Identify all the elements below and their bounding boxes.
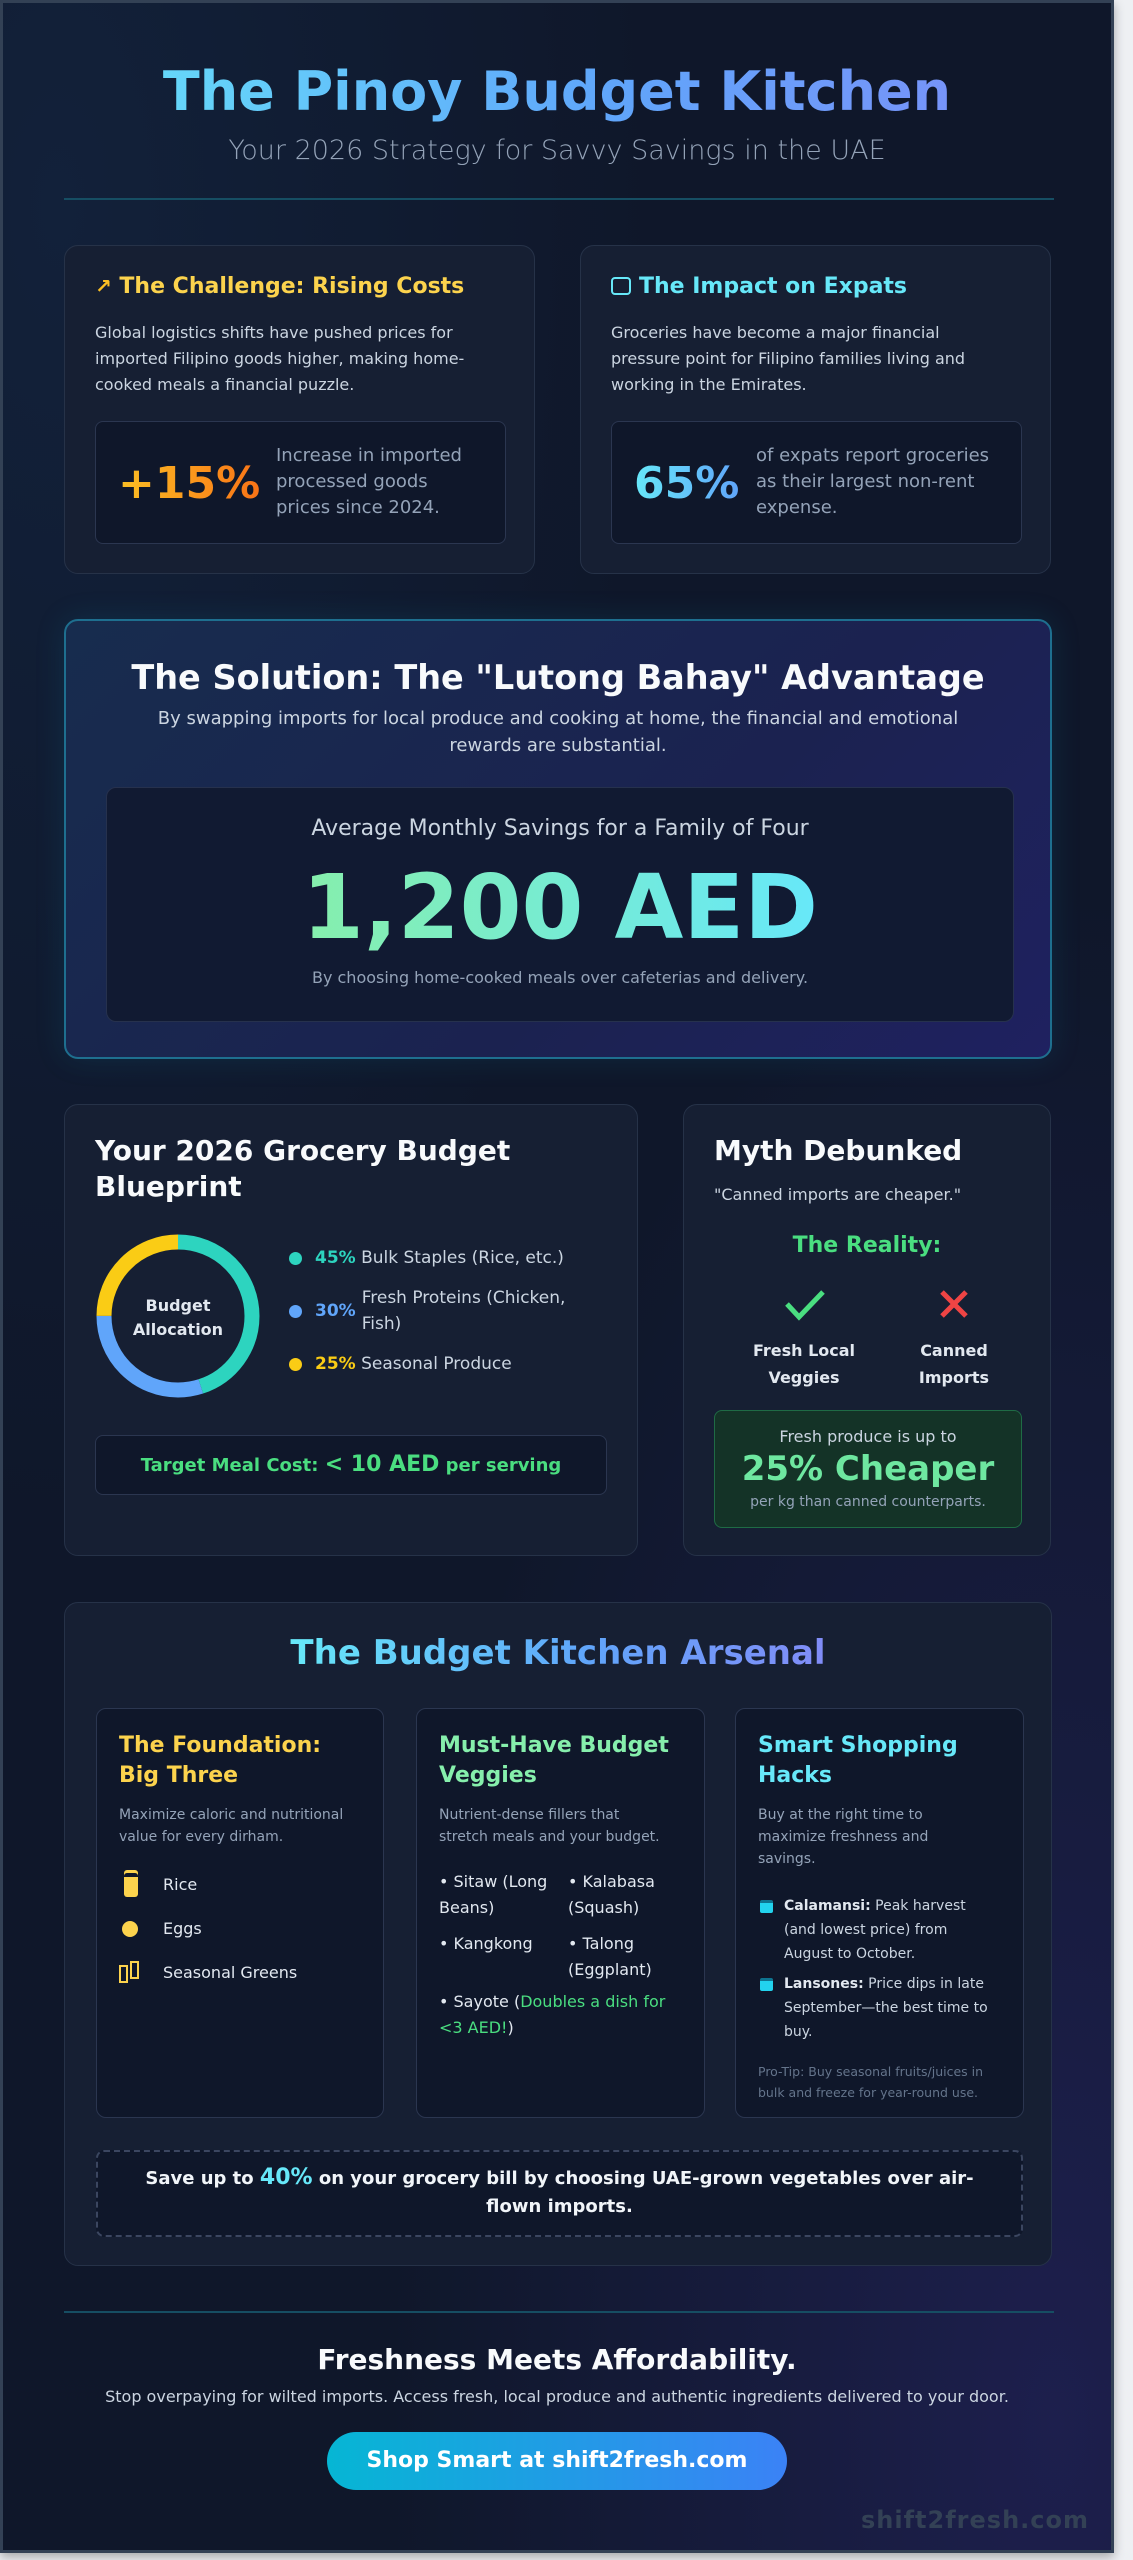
list: veggies: • Kangkong xyxy=(439,1934,533,1953)
list: big three: Eggs xyxy=(163,1919,202,1938)
list: veggies: • Talong (Eggplant) xyxy=(568,1934,652,1979)
list: hacks: Lansones: Price dips in late September—the best time to buy. xyxy=(784,1976,988,2040)
savings box: Average Monthly Savings for a Family of Four xyxy=(311,816,809,841)
text: solution: By swapping imports for local produce and cooking at home, the financial and emotional rewards are substantial. xyxy=(158,708,958,756)
heading: solution: The Solution: The "Lutong Bahay" Advantage xyxy=(131,658,985,697)
stat: 65%: 65% xyxy=(634,458,739,509)
sub-card: veggies xyxy=(416,1708,705,2118)
sub-card: hacks: Smart Shopping Hacks xyxy=(758,1733,958,1788)
callout: save 40%: Save up to 40% on your grocery bill by choosing UAE-grown vegetables over air-flown imports. xyxy=(145,2165,974,2217)
callout: 25% cheaper: per kg than canned counterparts. xyxy=(750,1494,986,1510)
donut chart: Allocation xyxy=(133,1320,223,1339)
icon: cross xyxy=(940,1290,968,1318)
savings box: By choosing home-cooked meals over cafeterias and delivery. xyxy=(312,968,808,987)
stat: 65%: of expats report groceries as their largest non-rent expense. xyxy=(756,445,989,518)
panel: myth debunked: Fresh Local Veggies xyxy=(753,1341,855,1387)
list: veggies xyxy=(439,1872,666,2037)
panel: impact xyxy=(580,245,1051,574)
list: veggies: • Kalabasa (Squash) xyxy=(568,1872,655,1917)
target meal cost xyxy=(95,1435,607,1495)
legend: 30% xyxy=(315,1301,356,1321)
legend: 25% Seasonal Produce xyxy=(315,1354,512,1374)
stat: +15%: Increase in imported processed goods prices since 2024. xyxy=(276,445,462,518)
callout: save 40% xyxy=(96,2150,1023,2237)
heading: impact: The Impact on Expats xyxy=(639,274,907,299)
list: veggies: • Sayote (Doubles a dish for <3 AED!) xyxy=(439,1992,665,2037)
legend: Fresh Proteins (Chicken, Fish) xyxy=(362,1288,565,1334)
heading: blueprint: Your 2026 Grocery Budget Blueprint xyxy=(95,1134,510,1203)
text: impact: Groceries have become a major financial pressure point for Filipino families living and working in the Emirates. xyxy=(611,323,965,394)
list: big three: Seasonal Greens xyxy=(163,1963,297,1982)
callout: 25% cheaper: Fresh produce is up to xyxy=(779,1427,957,1446)
title xyxy=(3,59,1111,125)
stat: +15% xyxy=(95,421,506,544)
watermark: shift2fresh.com xyxy=(861,2506,1089,2534)
panel: myth debunked: The Reality: xyxy=(793,1233,941,1258)
sub-card: hacks: Buy at the right time to maximize freshness and savings. xyxy=(758,1807,928,1867)
target meal cost: Target Meal Cost: < 10 AED per serving xyxy=(141,1452,561,1477)
list: hacks: Calamansi: Peak harvest (and lowest price) from August to October. xyxy=(784,1898,966,1962)
panel: challenge xyxy=(64,245,535,574)
donut chart xyxy=(96,1234,260,1398)
text: challenge: Global logistics shifts have pushed prices for imported Filipino goods higher, making home-cooked meals a financial puzzle. xyxy=(95,323,464,394)
sub-card: hacks: Pro-Tip: Buy seasonal fruits/juices in bulk and freeze for year-round use. xyxy=(758,2064,983,2100)
sub-card: veggies: Must-Have Budget Veggies xyxy=(439,1733,669,1788)
footer text: Stop overpaying for wilted imports. Access fresh, local produce and authentic ingredients delivered to your door. xyxy=(105,2387,1009,2406)
panel: myth debunked: Canned Imports xyxy=(919,1341,989,1387)
legend xyxy=(289,1248,565,1374)
sub-card: foundation: The Foundation: Big Three xyxy=(119,1733,321,1788)
sub-card: foundation xyxy=(96,1708,384,2118)
icon: check xyxy=(785,1290,825,1321)
panel: solution xyxy=(64,619,1052,1059)
savings box xyxy=(106,787,1014,1022)
callout: 25% cheaper xyxy=(714,1410,1022,1528)
donut chart: Budget xyxy=(146,1296,211,1315)
panel: arsenal xyxy=(64,1602,1052,2266)
list: big three xyxy=(119,1870,297,1983)
heading: challenge: ↗ The Challenge: Rising Costs xyxy=(95,274,464,299)
big number: 1,200 AED xyxy=(302,855,818,959)
button: shop smart xyxy=(327,2432,787,2490)
legend: 45% Bulk Staples (Rice, etc.) xyxy=(315,1248,564,1268)
button: shop smart: Shop Smart at shift2fresh.com xyxy=(367,2448,747,2473)
list: hacks xyxy=(760,1898,988,2040)
panel: budget blueprint xyxy=(64,1104,638,1556)
callout: 25% cheaper: 25% Cheaper xyxy=(742,1449,994,1489)
sub-card: veggies: Nutrient-dense fillers that stretch meals and your budget. xyxy=(439,1807,660,1845)
heading: arsenal: The Budget Kitchen Arsenal xyxy=(290,1633,826,1673)
panel: myth debunked xyxy=(683,1104,1051,1556)
stat: +15%: +15% xyxy=(118,458,260,509)
list: veggies: • Sitaw (Long Beans) xyxy=(439,1872,547,1917)
subtitle: Your 2026 Strategy for Savvy Savings in the UAE xyxy=(228,135,886,166)
list: big three: Rice xyxy=(163,1875,197,1894)
title: The Pinoy Budget Kitchen xyxy=(163,60,951,123)
sub-card: foundation: Maximize caloric and nutritional value for every dirham. xyxy=(119,1807,343,1845)
sub-card: hacks xyxy=(735,1708,1024,2118)
footer heading: Freshness Meets Affordability. xyxy=(317,2343,797,2376)
heading: myth: Myth Debunked xyxy=(714,1134,962,1167)
panel: myth debunked: "Canned imports are cheaper." xyxy=(714,1185,961,1204)
stat: 65% xyxy=(611,421,1022,544)
